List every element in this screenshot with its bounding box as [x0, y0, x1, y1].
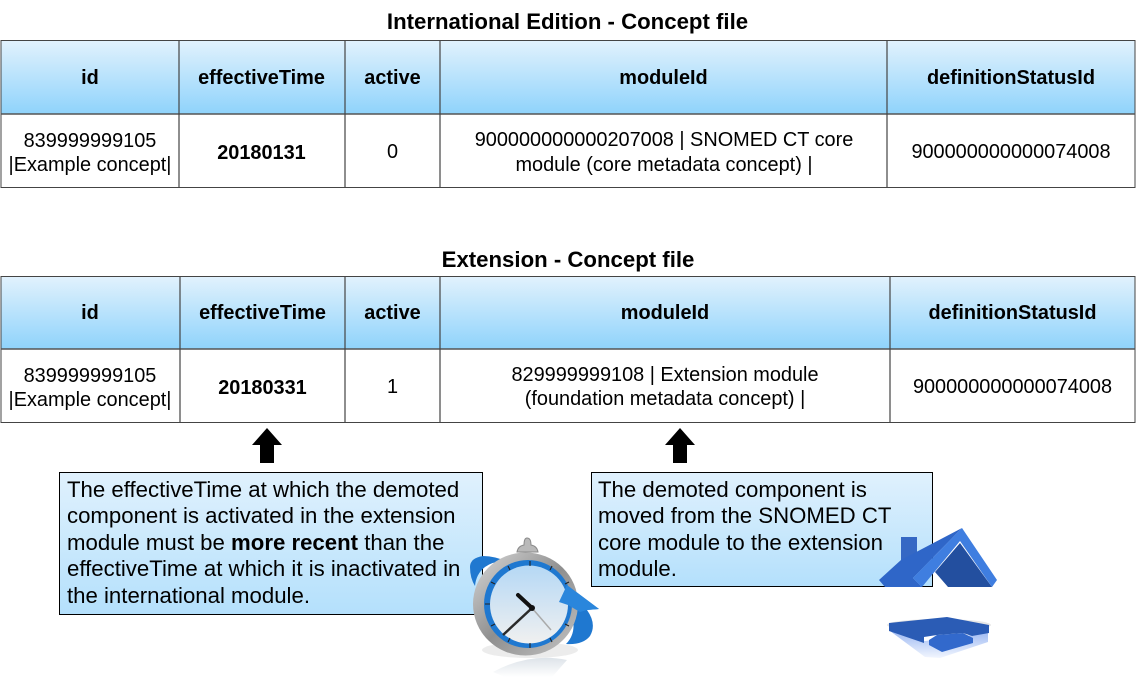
row values — [9, 129, 1111, 176]
callout: effectiveTime: module must be more recent than the — [67, 530, 444, 555]
row values: 900000000000207008 | SNOMED CT core — [475, 129, 853, 151]
row values: (foundation metadata concept) | — [525, 388, 805, 410]
row values: 20180131 — [217, 142, 306, 164]
icon: house — [879, 528, 997, 658]
row values — [9, 364, 1112, 411]
callout: moved module: core module to the extension — [598, 530, 883, 555]
row values: module (core metadata concept) | — [515, 154, 813, 176]
header labels: moduleId — [619, 67, 708, 89]
header labels: id — [81, 302, 99, 324]
header labels: active — [364, 302, 421, 324]
callout: effectiveTime: the international module. — [67, 583, 310, 608]
header row — [1, 276, 1135, 349]
row values: 839999999105 — [24, 130, 156, 152]
callout: effectiveTime — [60, 472, 482, 614]
header labels: definitionStatusId — [927, 67, 1095, 89]
row values: |Example concept| — [9, 389, 171, 411]
arrow: up to effectiveTime — [252, 428, 282, 463]
header labels: effectiveTime — [198, 67, 325, 89]
row values: 1 — [387, 376, 398, 398]
header labels: definitionStatusId — [929, 302, 1096, 324]
row values: 839999999105 — [24, 365, 156, 387]
callout: effectiveTime: The effectiveTime at which the demoted — [67, 477, 459, 502]
callout: effectiveTime: component is activated in the extension — [67, 503, 456, 528]
header labels: effectiveTime — [199, 302, 326, 324]
header labels — [81, 67, 1095, 89]
row values: 900000000000074008 — [911, 141, 1111, 163]
header labels: id — [81, 67, 99, 89]
callout: moved module: The demoted component is — [598, 477, 867, 502]
callout: moved module — [592, 472, 932, 586]
header labels — [81, 302, 1096, 324]
callout: effectiveTime: effectiveTime at which it is inactivated in — [67, 556, 460, 581]
callout: moved module: module. — [598, 556, 677, 581]
row values: 900000000000074008 — [913, 376, 1112, 398]
title: international edition: International Edition - Concept file — [387, 9, 748, 34]
title: extension: Extension - Concept file — [442, 247, 694, 272]
callout: moved module: moved from the SNOMED CT — [598, 503, 892, 528]
icon: stopwatch clock — [470, 538, 599, 677]
header labels: active — [364, 67, 421, 89]
header row — [1, 40, 1135, 114]
row values: 0 — [387, 141, 398, 163]
row values: 20180331 — [218, 377, 307, 399]
table: international edition concept file — [1, 40, 1135, 188]
row values: |Example concept| — [9, 154, 171, 176]
row values: 829999999108 | Extension module — [511, 364, 819, 386]
table: extension concept file — [1, 276, 1135, 422]
header labels: moduleId — [621, 302, 709, 324]
arrow: up to moduleId — [665, 428, 695, 463]
